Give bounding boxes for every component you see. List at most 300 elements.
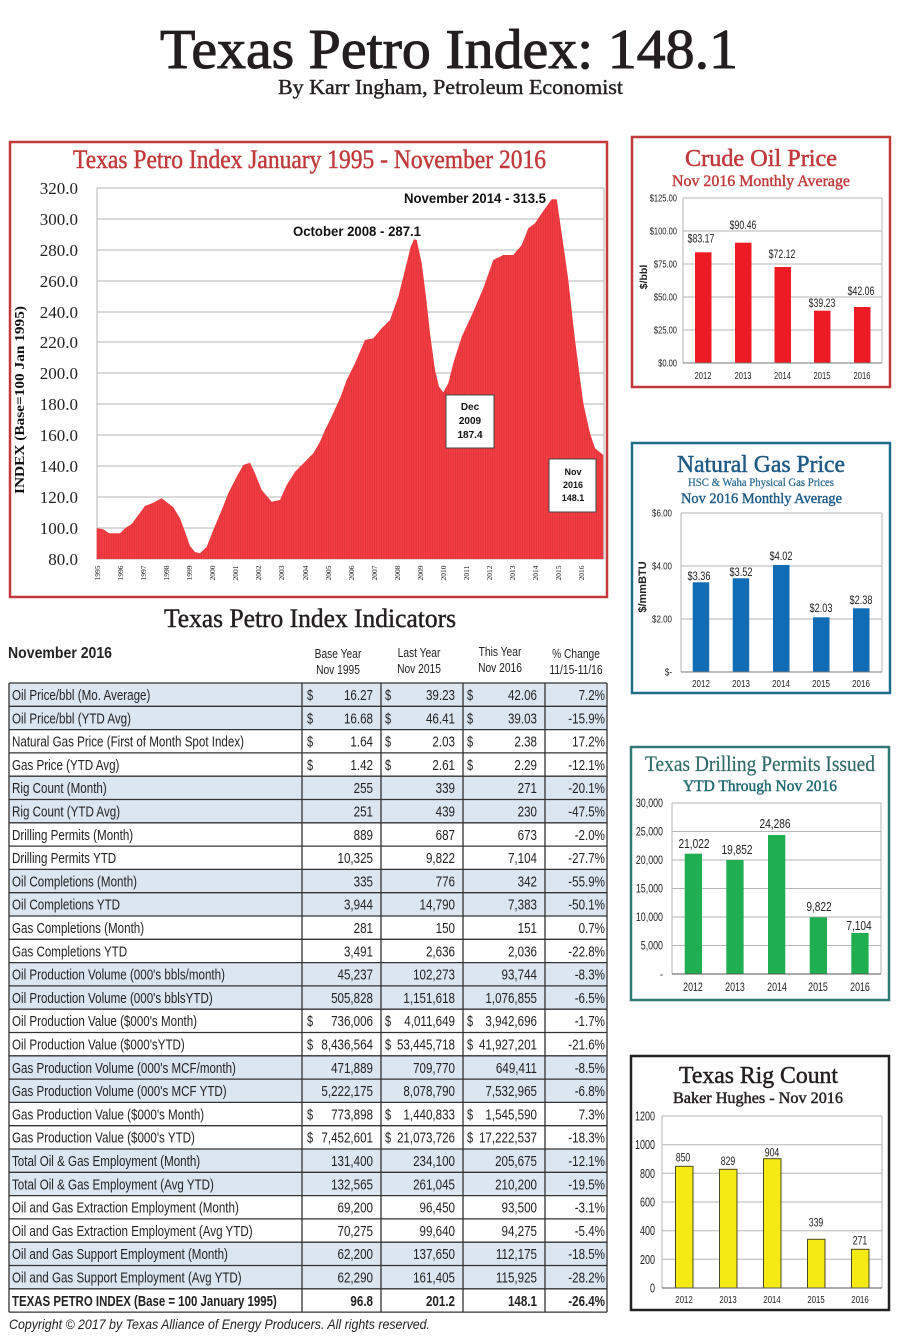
bar chart: drilling permits: 2014	[767, 981, 787, 994]
row labels: Total Oil & Gas Employment (Avg YTD)	[12, 1176, 214, 1193]
column: base year values: 471,889	[331, 1060, 373, 1076]
natural gas subheading: Nov 2016 Monthly Average	[681, 491, 842, 507]
row labels: Oil Production Volume (000's bbls/month)	[12, 966, 225, 983]
table month label: November 2016	[8, 645, 112, 662]
annotation: peak October 2008: October 2008 - 287.1	[293, 223, 421, 239]
bar chart: rig count: 800	[640, 1168, 655, 1181]
x axis year labels: 1999	[185, 565, 194, 580]
column: base year values: 69,200	[338, 1199, 373, 1216]
x axis year labels: 2008	[393, 565, 402, 580]
column: this year values: 3,942,696	[485, 1013, 537, 1030]
bar chart: rig count: 2013	[719, 1294, 737, 1305]
column: base year values: 1.42	[350, 757, 373, 773]
natural gas source line: HSC & Waha Physical Gas Prices	[688, 477, 834, 489]
column: last year values: 39.23	[426, 687, 455, 703]
bar chart: drilling permits: 2013	[725, 981, 745, 994]
column: base year values: 10,325	[338, 850, 373, 866]
bar chart: natural gas: 2016	[852, 678, 870, 689]
column: percent change: -6.8%	[575, 1083, 605, 1099]
column: this year values: 151	[518, 920, 537, 936]
column: this year values: 93,500	[502, 1199, 537, 1216]
column: this year values: 230	[518, 803, 537, 820]
column: this year values: 7,104	[508, 850, 537, 866]
dollar signs: $	[385, 756, 391, 773]
column headers: Nov 2015	[397, 663, 441, 676]
row labels: Gas Production Value ($000's YTD)	[12, 1129, 195, 1146]
bar chart: crude oil: $83.17	[688, 234, 715, 246]
y axis gridlines and labels: 220.0	[40, 333, 78, 352]
column: base year values: 96.8	[350, 1293, 373, 1309]
dollar signs: $	[385, 1106, 391, 1123]
column: last year values: 96,450	[420, 1199, 455, 1216]
drilling permits heading: Texas Drilling Permits Issued	[645, 751, 875, 776]
column: this year values: 42.06	[508, 687, 537, 703]
x axis year labels: 1995	[93, 565, 102, 580]
column: percent change: -18.3%	[568, 1129, 605, 1146]
dollar signs: $	[385, 1129, 391, 1146]
chart heading: Texas Petro Index January 1995 - November 2016	[73, 145, 546, 174]
dollar signs: $	[307, 756, 313, 773]
bar chart: rig count: 339	[809, 1218, 824, 1230]
bar chart: drilling permits: 2015	[808, 981, 828, 994]
row labels: Gas Price (YTD Avg)	[12, 757, 119, 773]
column: last year values: 46.41	[426, 710, 455, 727]
row labels: Oil Completions YTD	[12, 896, 120, 913]
bar chart: rig count: 850	[676, 1153, 691, 1165]
bar chart: rig count: 400	[640, 1225, 655, 1238]
column: last year values: 234,100	[413, 1153, 455, 1169]
subtitle: author: By Karr Ingham, Petroleum Economist	[278, 75, 623, 99]
dollar signs: $	[467, 686, 473, 703]
row labels: Gas Production Value ($000's Month)	[12, 1106, 204, 1123]
column: percent change: -26.4%	[568, 1293, 605, 1309]
bar chart: natural gas: 2012	[692, 678, 710, 689]
row labels: Oil and Gas Support Employment (Avg YTD)	[12, 1269, 242, 1286]
column: this year values: 1,076,855	[485, 990, 537, 1006]
panel: Texas Petro Index line chart	[10, 142, 607, 597]
dollar signs: $	[467, 1106, 473, 1123]
dollar signs: $	[307, 1013, 313, 1030]
callout: Dec 2009: 2009	[459, 416, 482, 427]
column: this year values	[479, 687, 537, 1309]
column: percent change: -8.5%	[575, 1060, 605, 1076]
column: last year values: 150	[436, 920, 455, 936]
column: last year values: 776	[436, 873, 455, 890]
bar chart: crude oil: $50.00	[654, 291, 677, 303]
dollar signs: $	[467, 1129, 473, 1146]
column: last year values: 709,770	[413, 1060, 455, 1076]
row labels: Oil and Gas Extraction Employment (Month)	[12, 1199, 239, 1216]
row labels: Oil Production Value ($000'sYTD)	[12, 1036, 185, 1053]
column: this year values: 112,175	[496, 1246, 537, 1263]
bar chart: natural gas: $4.02	[769, 551, 793, 563]
column: this year values: 2,036	[508, 943, 537, 960]
column: percent change: -2.0%	[575, 827, 605, 843]
row labels	[12, 687, 277, 1309]
bar chart: crude oil: $125.00	[650, 192, 677, 204]
column: base year values: 889	[354, 827, 373, 843]
column: percent change: -1.7%	[575, 1013, 605, 1030]
column: this year values: 93,744	[502, 966, 537, 983]
bar chart: crude oil: $100.00	[650, 225, 677, 237]
dollar signs: $	[307, 1106, 313, 1123]
table grid	[9, 683, 607, 1312]
panel: rig count	[631, 1056, 889, 1310]
row labels: Natural Gas Price (First of Month Spot Index)	[12, 733, 244, 750]
column: last year values: 439	[436, 803, 455, 820]
bar chart: crude oil: $39.23	[809, 298, 836, 310]
column: percent change: 7.2%	[579, 687, 605, 703]
column: last year values: 1,151,618	[403, 990, 455, 1006]
column: this year values: 115,925	[496, 1269, 537, 1286]
x axis year labels: 2002	[254, 565, 263, 580]
column: percent change: -55.9%	[568, 873, 605, 890]
column: this year values: 7,532,965	[485, 1083, 537, 1099]
column: base year values: 281	[354, 920, 373, 936]
bar chart: rig count: 2015	[807, 1294, 825, 1305]
column: base year values: 45,237	[338, 966, 373, 983]
callout: Dec 2009: Dec	[461, 402, 480, 413]
column: base year values	[321, 687, 373, 1309]
bar chart: drilling permits: 20,000	[636, 854, 663, 867]
column: last year values: 2.61	[432, 757, 455, 773]
heading: indicators table: Texas Petro Index Indicators	[164, 604, 456, 633]
row labels: Rig Count (YTD Avg)	[12, 803, 120, 820]
x axis year labels: 2016	[577, 565, 586, 580]
column: last year values: 4,011,649	[404, 1013, 455, 1030]
bar chart: drilling permits: 25,000	[636, 825, 663, 839]
bar chart: rig count: 600	[640, 1196, 655, 1210]
y axis gridlines and labels: 100.0	[40, 519, 78, 538]
bar chart: natural gas: 2015	[812, 678, 830, 689]
row labels: Rig Count (Month)	[12, 780, 107, 797]
column: percent change: -6.5%	[575, 990, 605, 1006]
column: this year values: 210,200	[495, 1176, 537, 1193]
column: last year values: 99,640	[420, 1223, 455, 1239]
column: last year values: 1,440,833	[403, 1106, 455, 1123]
bar chart: crude oil: 2015	[814, 370, 830, 381]
column: percent change: -27.7%	[568, 850, 605, 866]
dollar signs: $	[307, 733, 313, 750]
column: percent change: 0.7%	[579, 920, 605, 936]
column: base year values: 8,436,564	[321, 1036, 373, 1053]
row labels: Drilling Permits (Month)	[12, 827, 133, 843]
callout: Dec 2009	[446, 395, 494, 448]
annotation: peak November 2014: November 2014 - 313.5	[404, 190, 546, 206]
x axis year labels: 2012	[485, 565, 494, 580]
x axis year labels: 2007	[370, 565, 379, 580]
bar chart: drilling permits: 19,852	[722, 843, 752, 857]
crude oil subheading: Nov 2016 Monthly Average	[672, 173, 850, 190]
bar chart: crude oil: $0.00	[658, 357, 677, 369]
column: this year values: 342	[518, 873, 537, 890]
column: percent change: 17.2%	[572, 733, 605, 750]
rig count heading: Texas Rig Count	[679, 1063, 838, 1089]
x axis year labels: 1997	[139, 565, 148, 580]
panel: crude oil price	[632, 137, 890, 387]
bar chart: crude oil: 2014	[774, 370, 791, 381]
dollar signs: $	[467, 1036, 473, 1053]
shaded row bands	[9, 683, 607, 1289]
x axis year labels: 2003	[277, 565, 286, 580]
bar chart: natural gas: $2.00	[652, 613, 672, 625]
column: percent change: 7.3%	[579, 1106, 605, 1123]
y axis gridlines and labels: 160.0	[40, 426, 78, 445]
dollar signs: $	[307, 710, 313, 727]
column: percent change: -47.5%	[568, 803, 605, 820]
bar chart: crude oil: $90.46	[730, 220, 757, 232]
bar chart: rig count: 1000	[635, 1139, 655, 1152]
crude oil heading: Crude Oil Price	[685, 146, 837, 172]
bar chart: natural gas: $3.52	[729, 567, 753, 579]
bar chart: rig count: 1200	[635, 1110, 655, 1124]
bar chart: drilling permits: 2016	[850, 981, 870, 994]
column: last year values: 339	[436, 780, 455, 797]
column: this year values: 7,383	[508, 896, 537, 913]
callout: Nov 2016: 2016	[563, 480, 583, 490]
column: percent change: -5.4%	[575, 1223, 605, 1239]
bar chart: crude oil	[638, 192, 882, 381]
bar chart: crude oil: 2012	[695, 370, 711, 381]
dollar signs: $	[385, 686, 391, 703]
column: last year values: 21,073,726	[397, 1129, 455, 1146]
y axis gridlines and labels: 300.0	[40, 210, 78, 229]
column: base year values: 505,828	[331, 990, 373, 1006]
bar chart: natural gas: $4.00	[652, 560, 672, 572]
column: base year values: 16.68	[344, 710, 373, 727]
callout: Nov 2016: 148.1	[562, 493, 584, 503]
column headers	[315, 646, 603, 677]
column: percent change: -3.1%	[575, 1199, 605, 1216]
column: percent change	[568, 687, 605, 1309]
column: base year values: 773,898	[331, 1106, 373, 1123]
column: last year values: 161,405	[413, 1269, 455, 1286]
row labels: TEXAS PETRO INDEX (Base = 100 January 1995)	[12, 1293, 277, 1309]
y axis gridlines and labels: 80.0	[48, 550, 78, 569]
column: base year values: 335	[354, 873, 373, 890]
bar chart: drilling permits: 7,104	[846, 919, 872, 933]
row labels: Oil Price/bbl (YTD Avg)	[12, 710, 131, 727]
column: base year values: 70,275	[338, 1223, 373, 1239]
column: this year values: 271	[518, 780, 537, 797]
column headers: This Year	[479, 646, 522, 659]
x axis year labels: 2009	[416, 565, 425, 580]
callout: Dec 2009: 187.4	[457, 430, 483, 441]
bar chart: crude oil: $25.00	[654, 324, 677, 336]
column: base year values: 62,200	[338, 1246, 373, 1263]
bar chart: natural gas: 2014	[772, 678, 790, 689]
column: base year values: 736,006	[331, 1013, 373, 1030]
column: percent change: -28.2%	[568, 1269, 605, 1286]
rig count subheading: Baker Hughes - Nov 2016	[673, 1090, 843, 1107]
dollar signs: $	[467, 710, 473, 727]
dollar signs: $	[385, 710, 391, 727]
row labels: Oil Production Value ($000's Month)	[12, 1013, 197, 1030]
row labels: Gas Production Volume (000's MCF YTD)	[12, 1083, 227, 1099]
x axis year labels: 2015	[554, 565, 563, 580]
bar chart: rig count: 904	[765, 1148, 780, 1160]
column: last year values: 8,078,790	[403, 1083, 455, 1099]
bar chart: rig count: 2014	[763, 1294, 781, 1305]
bar chart: natural gas: $2.38	[849, 595, 873, 607]
x axis year labels: 2011	[462, 565, 471, 580]
column headers: Nov 2016	[478, 662, 522, 675]
dollar signs: $	[307, 1129, 313, 1146]
column: this year values: 148.1	[508, 1293, 537, 1309]
row labels: Gas Completions (Month)	[12, 920, 144, 936]
column: base year values: 132,565	[331, 1176, 373, 1193]
natural gas heading: Natural Gas Price	[677, 452, 845, 478]
column: base year values: 131,400	[331, 1153, 373, 1169]
callout: Nov 2016: Nov	[564, 467, 582, 477]
column: base year values: 255	[354, 780, 373, 797]
column: last year values: 102,273	[413, 966, 455, 983]
bar chart: drilling permits: 15,000	[636, 882, 663, 896]
bar chart: rig count: 200	[640, 1254, 655, 1267]
row labels: Oil Completions (Month)	[12, 873, 137, 890]
column: this year values: 17,222,537	[479, 1129, 537, 1146]
copyright: Copyright © 2017 by Texas Alliance of Energy Producers. All rights reserved.	[9, 1316, 430, 1332]
bar chart: drilling permits: 30,000	[636, 797, 663, 810]
dollar signs: $	[307, 686, 313, 703]
column: last year values	[397, 687, 455, 1309]
bar chart: crude oil: $/bbl	[638, 265, 650, 289]
row labels: Gas Completions YTD	[12, 943, 127, 960]
bar chart: rig count	[635, 1110, 882, 1305]
y axis gridlines and labels	[40, 179, 604, 569]
bar chart: drilling permits: 2012	[683, 981, 703, 994]
column headers: Nov 1995	[316, 664, 360, 677]
title: Texas Petro Index: 148.1	[160, 19, 738, 81]
y axis gridlines and labels: 140.0	[40, 457, 78, 476]
column: last year values: 261,045	[413, 1176, 455, 1193]
column: this year values: 1,545,590	[485, 1106, 537, 1123]
callout: Nov 2016	[549, 459, 596, 512]
y axis gridlines and labels: 240.0	[40, 303, 78, 322]
dollar signs: $	[307, 1036, 313, 1053]
column: base year values: 16.27	[344, 687, 373, 703]
row labels: Oil and Gas Extraction Employment (Avg YTD)	[12, 1223, 253, 1239]
column: percent change: -8.3%	[575, 966, 605, 983]
column: this year values: 2.38	[514, 733, 537, 750]
column: percent change: -20.1%	[568, 780, 605, 797]
column: percent change: -18.5%	[568, 1246, 605, 1263]
column: base year values: 1.64	[350, 733, 373, 750]
column: this year values: 673	[518, 827, 537, 843]
bar chart: drilling permits: 24,286	[760, 817, 790, 831]
x axis year labels: 2013	[508, 565, 517, 580]
x axis year labels: 2004	[301, 565, 310, 580]
drilling permits subheading: YTD Through Nov 2016	[683, 778, 837, 795]
bar chart: rig count: 2016	[851, 1294, 869, 1305]
column: this year values: 41,927,201	[479, 1036, 537, 1053]
column: percent change: -22.8%	[568, 943, 605, 960]
dollar signs: $	[385, 733, 391, 750]
y axis gridlines and labels: 320.0	[40, 179, 78, 198]
bar chart: natural gas: $3.36	[687, 571, 711, 583]
bar chart: drilling permits: 21,022	[679, 837, 709, 851]
x axis year labels: 1996	[116, 565, 125, 580]
bar chart: crude oil: 2013	[735, 370, 751, 381]
column headers: % Change	[552, 648, 600, 661]
bar chart: natural gas	[637, 507, 882, 689]
column: last year values: 53,445,718	[397, 1036, 455, 1053]
bar chart: crude oil: $42.06	[848, 286, 875, 298]
bar chart: natural gas: $/mmBTU	[637, 561, 649, 613]
column: last year values: 9,822	[426, 850, 455, 866]
dollar signs: $	[385, 1036, 391, 1053]
column: percent change: -50.1%	[568, 896, 605, 913]
column: percent change: -12.1%	[568, 757, 605, 773]
y axis title: INDEX (Base=100 Jan 1995)	[12, 306, 27, 494]
bar chart: drilling permits: 5,000	[641, 939, 663, 953]
x axis year labels: 2005	[324, 565, 333, 580]
y axis gridlines and labels: 280.0	[40, 241, 78, 260]
column: percent change: -12.1%	[568, 1153, 605, 1169]
row labels: Oil and Gas Support Employment (Month)	[12, 1246, 228, 1263]
column headers: 11/15-11/16	[549, 664, 603, 677]
panel: drilling permits	[631, 747, 889, 1000]
column: percent change: -15.9%	[568, 710, 605, 727]
x axis year labels: 1998	[162, 565, 171, 580]
bar chart: natural gas: $2.03	[809, 603, 833, 615]
bar chart: natural gas: $-	[665, 666, 672, 678]
bar chart: drilling permits: -	[660, 968, 663, 981]
x axis year labels: 2010	[439, 565, 448, 580]
bar chart: rig count: 2012	[675, 1294, 693, 1305]
bar chart: crude oil: 2016	[854, 370, 870, 381]
bar chart: natural gas: 2013	[732, 678, 750, 689]
y axis gridlines and labels: 120.0	[40, 488, 78, 507]
row labels: Oil Price/bbl (Mo. Average)	[12, 687, 150, 703]
column: this year values: 649,411	[496, 1060, 537, 1076]
x axis year labels: 2006	[347, 565, 356, 580]
red area series	[97, 199, 603, 559]
column: base year values: 251	[354, 803, 373, 820]
column: last year values: 2.03	[432, 733, 455, 750]
column: base year values: 3,944	[344, 896, 373, 913]
dollar signs: $	[467, 756, 473, 773]
bar chart: rig count: 271	[853, 1236, 868, 1248]
column: base year values: 62,290	[338, 1269, 373, 1286]
dollar signs	[307, 686, 473, 1146]
bar chart: drilling permits: 10,000	[636, 911, 663, 924]
panel: natural gas price	[632, 443, 890, 693]
x axis year labels	[93, 565, 586, 580]
bar chart: rig count: 0	[650, 1282, 655, 1296]
column: last year values: 14,790	[420, 896, 455, 913]
column headers: Last Year	[398, 647, 441, 660]
bar chart: natural gas: $6.00	[652, 507, 672, 519]
dollar signs: $	[467, 1013, 473, 1030]
column: this year values: 2.29	[514, 757, 537, 773]
bar chart: rig count: 829	[721, 1156, 736, 1168]
row labels: Gas Production Volume (000's MCF/month)	[12, 1060, 236, 1076]
y axis gridlines and labels: 200.0	[40, 364, 78, 383]
bar chart: crude oil: $75.00	[654, 258, 677, 270]
column: this year values: 39.03	[508, 710, 537, 727]
column: base year values: 3,491	[344, 943, 373, 960]
column: base year values: 5,222,175	[321, 1083, 373, 1099]
dollar signs: $	[385, 1013, 391, 1030]
column: last year values: 201.2	[426, 1293, 455, 1309]
column: last year values: 687	[436, 827, 455, 843]
bar chart: drilling permits	[636, 797, 881, 994]
x axis year labels: 2000	[208, 565, 217, 580]
column: this year values: 94,275	[502, 1223, 537, 1239]
table: indicators	[8, 645, 607, 1312]
y axis gridlines and labels: 180.0	[40, 395, 78, 414]
